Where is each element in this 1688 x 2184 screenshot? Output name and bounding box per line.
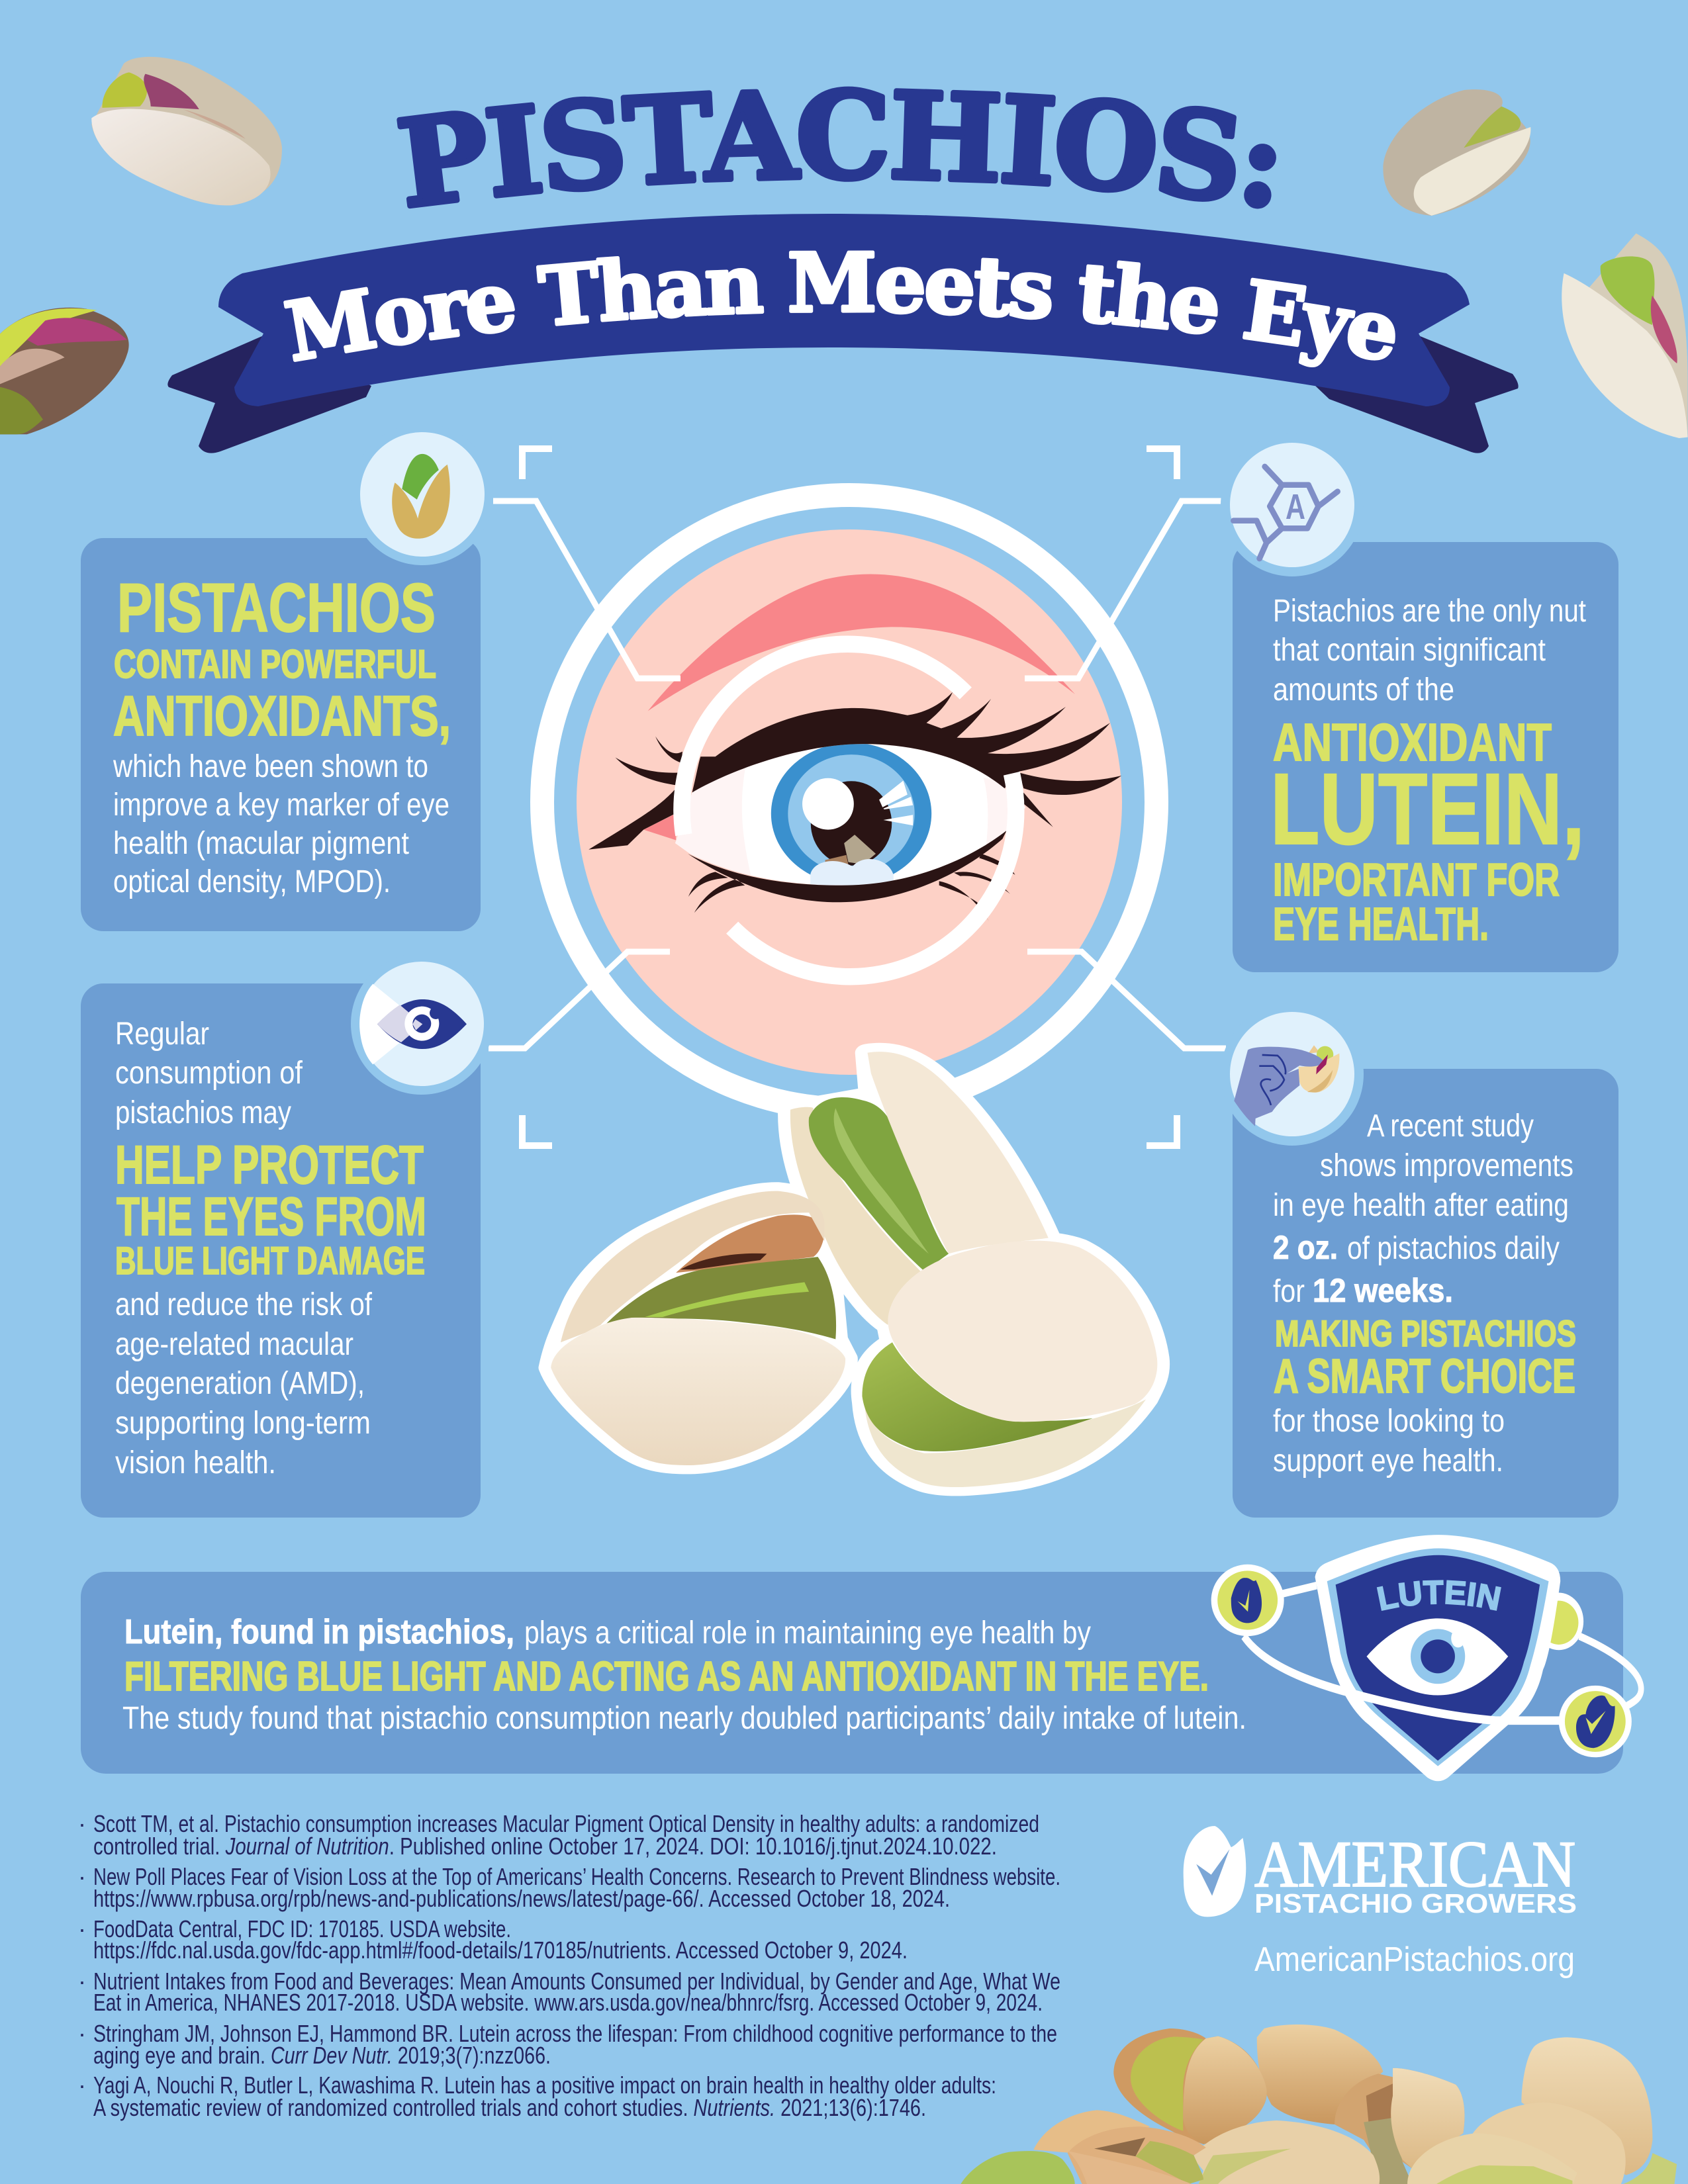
pistachio: left [551,1191,845,1465]
intro text [115,1017,303,1130]
references: Eat in America, NHANES 2017-2018. USDA website. www.ars.usda.gov/nea/bhnrc/fsrg. Accessed October 9, 2024. [93,1989,1043,2016]
references [78,1810,1060,2121]
body text: of pistachios daily [1347,1231,1560,1266]
orbit back [1282,1586,1641,1706]
orbit front [1244,1636,1560,1721]
panel: lutein summary [81,1572,1623,1774]
body text: for [1273,1274,1305,1309]
intro text: amounts of the [1273,672,1454,707]
body text: 12 weeks. [1313,1272,1453,1309]
American Pistachio Growers logo: PISTACHIO GROWERS [1254,1888,1577,1919]
website: AmericanPistachios.org [1254,1940,1575,1979]
body text [1273,1109,1573,1309]
body text: degeneration (AMD), [115,1366,365,1401]
orb right [1559,1686,1632,1757]
body text: shows improvements [1320,1148,1573,1183]
body text: supporting long-term [115,1406,371,1441]
summary text: Lutein, found in pistachios, [124,1613,514,1651]
references: · [78,1968,86,1995]
American Pistachio Growers logo [1184,1826,1577,1979]
references: FoodData Central, FDC ID: 170185. USDA website. [93,1915,511,1942]
summary text: plays a critical role in maintaining eye health by [524,1615,1091,1651]
references: · [78,1915,86,1942]
body text: and reduce the risk of [115,1287,373,1322]
logo mark [1184,1826,1246,1917]
body text [115,1287,373,1480]
pistachio: right edge [1562,234,1688,438]
pistachio: back [790,1052,1049,1325]
eye illustration [542,495,1156,1109]
badge label [1377,1580,1501,1611]
badge label: LUTEIN [1377,1580,1501,1611]
heading: CONTAIN POWERFUL [114,642,436,686]
shield [1315,1535,1560,1781]
heading: BLUE LIGHT DAMAGE [115,1240,425,1283]
pistachio: top right [1383,89,1530,216]
references: controlled trial. Journal of Nutrition. Published online October 17, 2024. DOI: 10.1016/j.tjnut.2024.10.022. [93,1833,997,1860]
references: Nutrient Intakes from Food and Beverages: Mean Amounts Consumed per Individual, by Gender and Age, What We [93,1968,1060,1995]
heading: ANTIOXIDANTS, [113,685,451,748]
body text: 2 oz. [1273,1229,1338,1266]
body text [113,749,449,899]
references: · [78,1863,86,1890]
body text: vision health. [115,1445,276,1480]
connector lines and corner brackets [489,449,1226,1146]
icon: eye with blue light [351,953,492,1095]
intro text [1273,594,1586,707]
intro text: pistachios may [115,1095,291,1130]
panel: blue light [81,983,481,1518]
ribbon tail: right [1315,336,1519,453]
ribbon tail: left [167,336,371,453]
icon: hand holding pistachio [1221,1003,1364,1146]
references: New Poll Places Fear of Vision Loss at the Top of Americans’ Health Concerns. Research to Prevent Blindness website. [93,1863,1060,1890]
logo wordmark: AMERICAN [1254,1827,1575,1901]
references: aging eye and brain. Curr Dev Nutr. 2019;3(7):nzz066. [93,2042,551,2069]
intro text: consumption of [115,1056,303,1091]
references: Stringham JM, Johnson EJ, Hammond BR. Lutein across the lifespan: From childhood cognitive performance to the [93,2020,1057,2047]
body text: A recent study [1367,1109,1534,1144]
body text: which have been shown to [113,749,428,784]
references: · [78,2071,86,2099]
heading: A SMART CHOICE [1274,1350,1575,1403]
ribbon banner [167,214,1519,453]
panel: recent study [1233,1069,1618,1518]
pistachio pile photo [961,2025,1677,2184]
references: A systematic review of randomized controlled trials and cohort studies. Nutrients. 2021;13(6):1746. [93,2094,926,2121]
references: Yagi A, Nouchi R, Butler L, Kawashima R. Lutein has a positive impact on brain health in healthy older adults: [93,2071,996,2099]
body text: age-related macular [115,1327,353,1362]
closing text: for those looking to [1273,1404,1505,1439]
upper lid and lashes [588,692,1121,850]
summary text [122,1613,1246,1736]
body text: health (macular pigment [113,826,409,861]
heading: LUTEIN, [1270,752,1585,866]
intro text: Pistachios are the only nut [1273,594,1586,629]
closing text [1273,1404,1505,1479]
subtitle: More Than Meets the Eye [283,250,1395,367]
intro text: Regular [115,1017,209,1052]
pistachio: right [862,1241,1157,1487]
orb top right [1534,1593,1583,1650]
references: https://fdc.nal.usda.gov/fdc-app.html#/food-details/170185/nutrients. Accessed October 9, 2024. [93,1936,908,1964]
outer ring [542,495,1156,1109]
icon: lutein molecule: A [1286,487,1305,527]
body text: in eye health after eating [1273,1188,1569,1223]
intro text: that contain significant [1273,633,1546,668]
heading: EYE HEALTH. [1273,898,1489,950]
pink circle [577,529,1122,1075]
panel: lutein [1233,542,1618,972]
heading: ANTIOXIDANT [1273,713,1552,772]
heading [1274,1312,1576,1403]
lower lid and lashes [688,831,1015,921]
summary text: The study found that pistachio consumption nearly doubled participants’ daily intake of lutein. [122,1701,1246,1736]
references: · [78,2020,86,2047]
icon: lutein molecule [1221,433,1364,576]
inner lens arcs [682,644,1016,977]
lutein shield badge [1211,1535,1644,1782]
eye drawing [588,574,1121,977]
heading: IMPORTANT FOR [1273,854,1560,905]
panel: antioxidants [81,538,481,931]
sclera [673,738,1028,889]
eye on shield [1366,1618,1508,1695]
heading: THE EYES FROM [117,1187,426,1247]
heading [1270,713,1585,950]
heading: MAKING PISTACHIOS [1275,1312,1576,1354]
heading [115,1135,426,1283]
ribbon body [218,214,1470,406]
references: · [78,1810,86,1837]
summary text: FILTERING BLUE LIGHT AND ACTING AS AN ANTIOXIDANT IN THE EYE. [124,1654,1209,1700]
pistachio: top left [91,57,282,205]
orb left [1211,1565,1284,1636]
references: https://www.rpbusa.org/rpb/news-and-publications/news/latest/page-66/. Accessed October 18, 2024. [93,1885,950,1912]
pistachio: left edge [0,308,129,434]
closing text: support eye health. [1273,1443,1503,1479]
white outline [551,1052,1157,1487]
heading [113,570,451,748]
heading: HELP PROTECT [115,1135,424,1195]
main pistachios photo [551,1052,1157,1487]
heading: PISTACHIOS [117,570,436,647]
references: Scott TM, et al. Pistachio consumption increases Macular Pigment Optical Density in healthy adults: a randomized [93,1810,1039,1837]
body text: optical density, MPOD). [113,864,391,899]
body text: improve a key marker of eye [113,788,449,823]
title: PISTACHIOS: [397,86,1276,209]
eyebrow shadow [648,574,1075,711]
icon: pistachio check [352,424,493,565]
